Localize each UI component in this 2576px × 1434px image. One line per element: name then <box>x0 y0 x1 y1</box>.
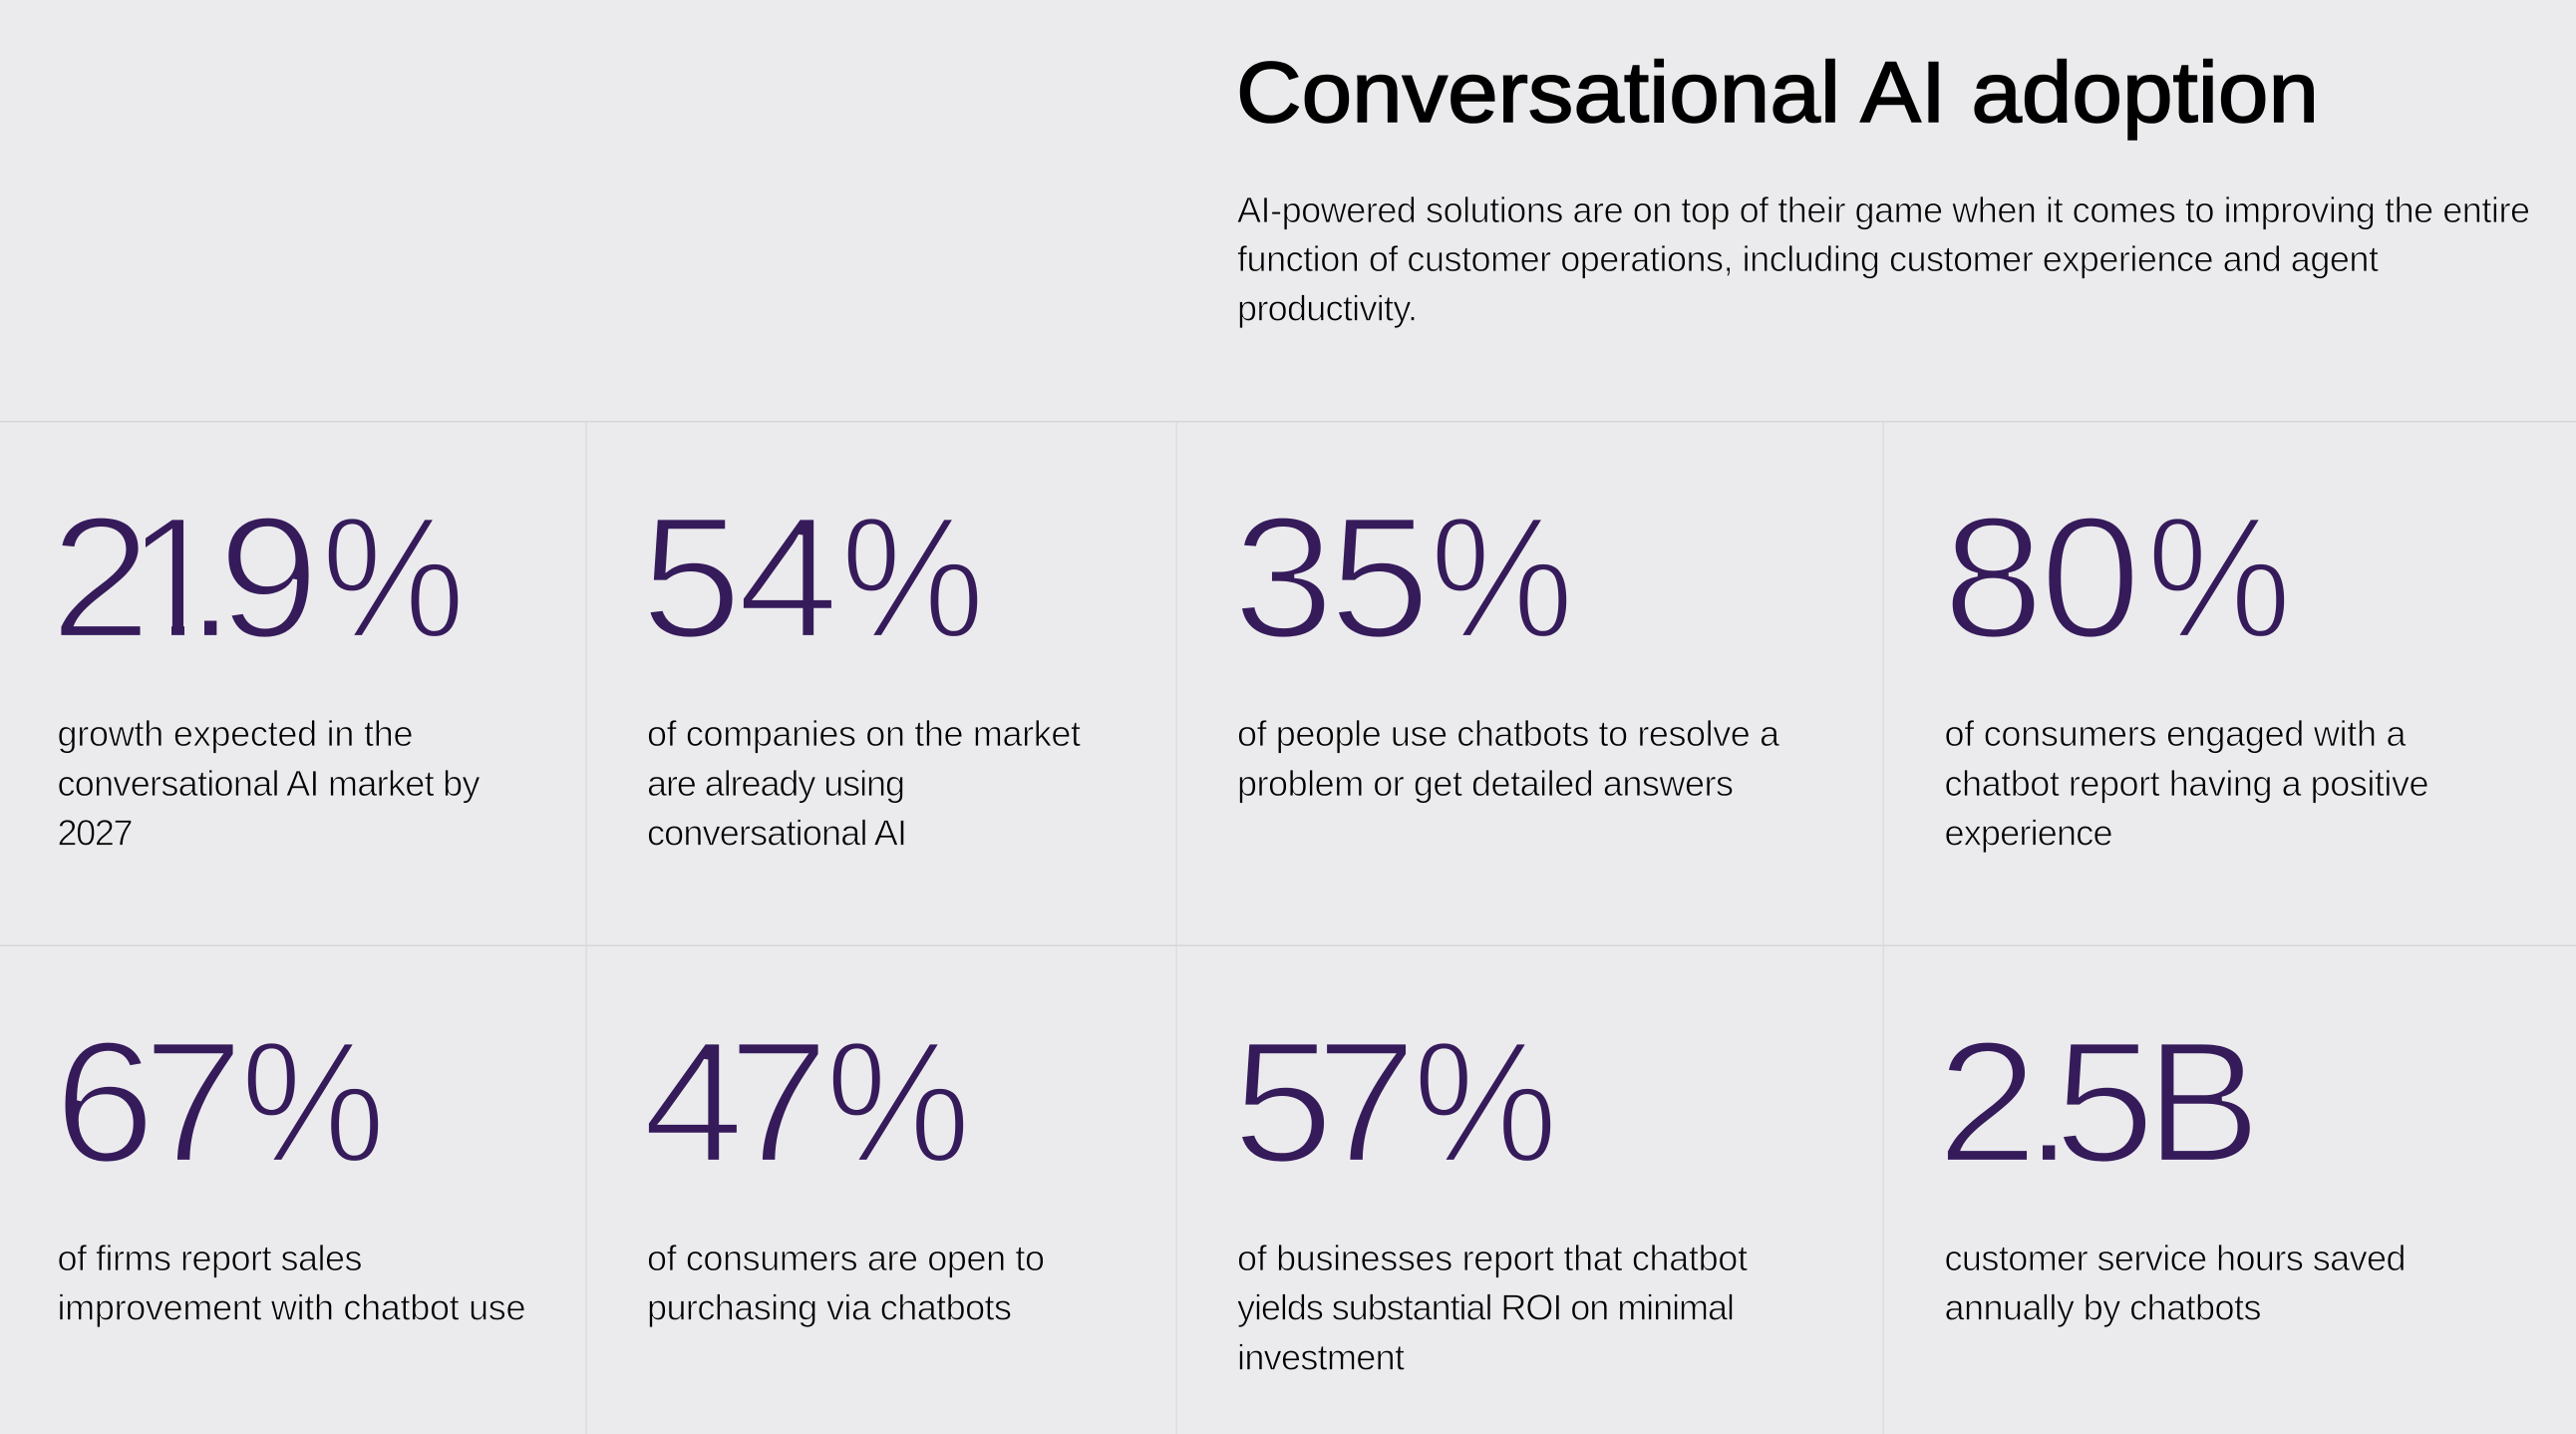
number: 21.9%: 2 <box>50 480 152 674</box>
description <box>1237 1238 1748 1378</box>
description: of firms report sales <box>58 1238 363 1278</box>
number: 67%: 7 <box>143 1004 244 1199</box>
number: 47%: % <box>825 1004 971 1199</box>
number: 80%: % <box>2146 480 2292 674</box>
intro text <box>1237 189 2530 329</box>
number: 54%: % <box>840 480 985 674</box>
number: 21.9% <box>61 519 459 637</box>
number: 67% <box>54 1004 386 1199</box>
number: 35% <box>1232 480 1574 674</box>
number: 80%: 8 <box>1942 480 2044 674</box>
number: 57%: % <box>1413 1004 1558 1199</box>
intro text: AI-powered solutions are on top of their game when it comes to improving the entire <box>1237 189 2530 230</box>
number: 2.5B <box>1936 1004 2261 1199</box>
description: annually by chatbots <box>1944 1286 2261 1328</box>
number: 80% <box>1942 480 2292 674</box>
description <box>647 1238 1045 1328</box>
description: problem or get detailed answers <box>1237 763 1734 804</box>
panel: stat 21.9% <box>59 519 480 846</box>
number: 47%: 4 <box>642 1004 744 1199</box>
description <box>58 713 481 854</box>
description: of businesses report that chatbot <box>1237 1238 1748 1278</box>
number: 54% <box>640 480 985 674</box>
description: chatbot report having a positive <box>1944 763 2428 804</box>
description: are already using <box>647 763 905 804</box>
description <box>1944 1238 2407 1328</box>
description: conversational AI market by <box>58 763 481 804</box>
number: 57%: 7 <box>1316 1004 1418 1199</box>
description <box>58 1238 526 1328</box>
description: investment <box>1237 1336 1405 1378</box>
number: 57%: 5 <box>1232 1004 1334 1199</box>
number: 21.9%: % <box>321 480 466 674</box>
panel: stat 67% <box>54 1004 526 1328</box>
number: 21.9%: 9 <box>217 480 319 674</box>
number: 80%: 0 <box>2040 480 2141 674</box>
description: yields substantial ROI on minimal <box>1237 1286 1735 1328</box>
number: 57% <box>1232 1004 1558 1199</box>
number: 2.5B: 2 <box>1936 1004 2038 1199</box>
description: growth expected in the <box>58 713 413 754</box>
description: of consumers are open to <box>647 1238 1045 1278</box>
description: customer service hours saved <box>1944 1238 2407 1278</box>
description: conversational AI <box>647 812 907 854</box>
panel: stat 57% <box>1232 1004 1748 1378</box>
description: of companies on the market <box>647 713 1081 754</box>
panel: stat 2.5B <box>1936 1004 2407 1328</box>
number: 47% <box>642 1004 971 1199</box>
intro text: productivity. <box>1237 287 1418 329</box>
number: 21.9%: 1 <box>127 480 223 674</box>
description <box>1944 713 2428 854</box>
number: 35%: 5 <box>1329 480 1431 674</box>
number: 2.5B: 5 <box>2054 1004 2155 1199</box>
description: of people use chatbots to resolve a <box>1237 713 1780 754</box>
number: 54%: 5 <box>640 480 742 674</box>
title: Conversational AI adoption <box>1236 45 2319 141</box>
panel: stat 80% <box>1942 480 2428 854</box>
description: 2027 <box>58 812 134 854</box>
number: 35%: 3 <box>1232 480 1334 674</box>
description: purchasing via chatbots <box>647 1286 1012 1328</box>
description <box>1237 713 1780 804</box>
number: 67%: % <box>240 1004 386 1199</box>
number: 35%: % <box>1430 480 1574 674</box>
panel: stat 54% <box>640 480 1081 854</box>
intro text: function of customer operations, including customer experience and agent <box>1237 238 2379 279</box>
number: 2.5B: . <box>2025 1004 2073 1199</box>
number: 67%: 6 <box>54 1004 156 1199</box>
description: of consumers engaged with a <box>1944 713 2407 754</box>
description: experience <box>1944 812 2113 854</box>
number: 21.9%: . <box>186 480 234 674</box>
description: improvement with chatbot use <box>58 1286 526 1328</box>
number: 47%: 7 <box>728 1004 829 1199</box>
panel: stat 47% <box>642 1004 1045 1328</box>
number: 2.5B: B <box>2145 1004 2261 1199</box>
panel: stat 35% <box>1232 480 1780 804</box>
description <box>647 713 1081 854</box>
number: 54%: 4 <box>738 480 839 674</box>
